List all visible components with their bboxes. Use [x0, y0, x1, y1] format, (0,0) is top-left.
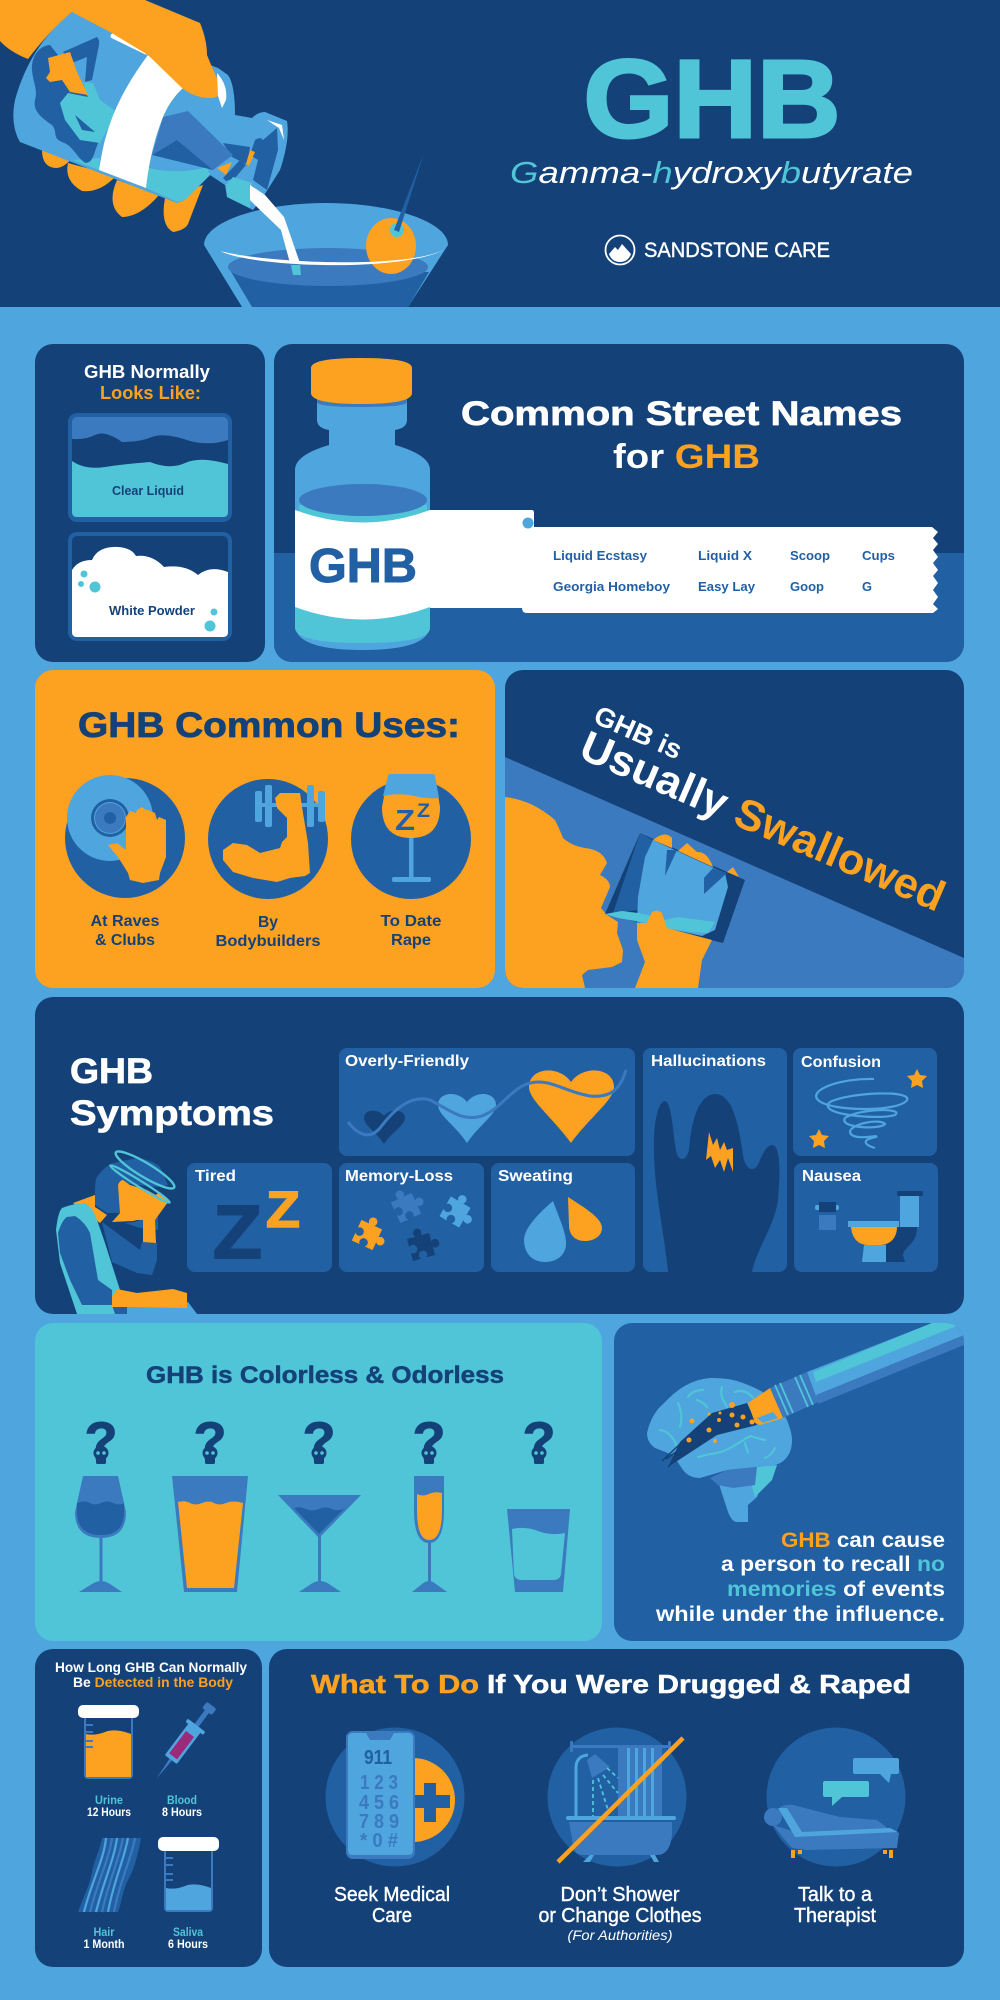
- text: memory: a person to recall no: [721, 1553, 945, 1576]
- label: bodybuilders: Bodybuilders: [216, 933, 321, 950]
- tape with names: Georgia Homeboy: [553, 579, 671, 594]
- tape with names: Liquid X: [698, 548, 752, 563]
- card: sweating: [491, 1163, 635, 1272]
- heading: what to do: If You Were Drugged & Raped: [487, 1669, 911, 1699]
- bottle: GHB: [309, 540, 417, 593]
- icons: question marks with skulls: ?: [84, 1412, 118, 1471]
- panel: street names: [274, 344, 964, 662]
- heading: GHB: GHB: [70, 1052, 153, 1091]
- value: 6 hours: 6 Hours: [168, 1939, 208, 1951]
- icon: phone with medical cross: 7 8 9: [359, 1811, 399, 1833]
- card: memory loss: Memory-Loss: [345, 1168, 453, 1185]
- label: to date: To Date: [380, 913, 442, 930]
- note: for authorities: (For Authorities): [568, 1928, 672, 1943]
- tape with names: Liquid Ecstasy: [553, 548, 648, 563]
- heading: colorless: GHB is Colorless & Odorless: [146, 1362, 504, 1389]
- icon: spiked wine: [351, 774, 471, 899]
- card: confusion: [793, 1048, 937, 1156]
- panel: looks like: [35, 344, 265, 662]
- icon: phone with medical cross: 1 2 3: [360, 1772, 398, 1794]
- glass: flute: [412, 1476, 447, 1592]
- illustration: paintbrush: [662, 1323, 964, 1467]
- panel: detection times: [35, 1649, 262, 1967]
- icon: crossed out shower: [548, 1728, 686, 1866]
- card: tired: Z: [213, 1190, 262, 1274]
- heading: looks like: Looks Like:: [100, 383, 201, 403]
- icon: raves: [65, 775, 185, 898]
- heading: usually swallowed: Usually Swallowed: [573, 722, 952, 921]
- card: nausea: Nausea: [802, 1168, 861, 1185]
- tape with names: [425, 510, 938, 613]
- icon: phone with medical cross: 911: [364, 1747, 392, 1769]
- label: rape: Rape: [391, 932, 431, 949]
- text: memory: GHB can cause: [781, 1529, 945, 1552]
- icon: therapy couch and speech bubbles: [764, 1728, 906, 1866]
- card: overly friendly: Overly-Friendly: [345, 1053, 469, 1070]
- card: white powder: White Powder: [109, 604, 195, 618]
- heading: GHB is: GHB is: [590, 700, 687, 765]
- heading: street names: Common Street Names: [461, 395, 902, 433]
- illustration: head drinking: [505, 797, 745, 988]
- heading: what to do: [311, 1669, 911, 1699]
- tape with names: Cups: [862, 548, 895, 563]
- label: talk to a: Talk to a: [798, 1884, 873, 1906]
- card: tired: Z: [266, 1181, 300, 1238]
- label: raves: At Raves: [90, 913, 160, 930]
- illustration: fingers behind bottle: [42, 150, 203, 232]
- heading: detected in body: Be Detected in the Body: [73, 1675, 233, 1690]
- glass: wine: [75, 1476, 126, 1592]
- label: saliva: Saliva: [173, 1927, 204, 1939]
- heading: detection: How Long GHB Can Normally: [55, 1660, 247, 1675]
- label: blood: Blood: [167, 1795, 197, 1807]
- tape with names: Goop: [790, 579, 824, 594]
- icon: saliva jar: [158, 1837, 219, 1912]
- panel: common uses: [35, 670, 495, 988]
- label: dont shower: Don’t Shower: [560, 1884, 680, 1906]
- card: memory loss: [339, 1163, 484, 1272]
- icons: question marks with skulls: ?: [194, 1412, 226, 1471]
- panel: memory: [614, 1323, 964, 1641]
- icon: phone with medical cross: * 0 #: [360, 1830, 398, 1852]
- icons: question marks with skulls: ?: [522, 1412, 556, 1471]
- label: care: Care: [372, 1905, 412, 1927]
- heading: Symptoms: Symptoms: [70, 1094, 274, 1133]
- icon: phone with medical cross: [326, 1728, 464, 1866]
- tape with names: Scoop: [790, 548, 830, 563]
- illustration: hand holding bottle: [0, 0, 226, 108]
- panel: colorless and odorless: [35, 1323, 602, 1641]
- illustration: tilted bottle: [13, 12, 288, 210]
- tape with names: G: [862, 579, 872, 594]
- subtitle: Gamma- hydroxy butyrate: [510, 155, 913, 190]
- value: 1 month: 1 Month: [84, 1939, 124, 1951]
- label: urine: Urine: [95, 1795, 123, 1807]
- heading: what to do: What To Do: [311, 1669, 479, 1699]
- logo: Sandstone Care: SANDSTONE CARE: [644, 239, 830, 262]
- label: by: By: [258, 914, 278, 931]
- glass: pint: [172, 1476, 248, 1592]
- title: GHB: [584, 38, 840, 161]
- card: sweating: Sweating: [498, 1168, 573, 1185]
- illustration: tired person: [56, 1146, 197, 1314]
- bottle: [295, 358, 430, 650]
- text: memory: memories of events: [727, 1578, 945, 1601]
- icons: question marks with skulls: [84, 1412, 556, 1471]
- tape with names: Easy Lay: [698, 579, 756, 594]
- value: 12 hours: 12 Hours: [87, 1807, 131, 1819]
- value: 8 hours: 8 Hours: [162, 1807, 202, 1819]
- panel: what to do: [269, 1649, 964, 1967]
- icon: hair: [78, 1838, 141, 1912]
- logo: Sandstone Care: [606, 236, 830, 264]
- card: confusion: Confusion: [801, 1054, 881, 1071]
- icons: question marks with skulls: ?: [412, 1412, 446, 1471]
- heading: for GHB: for GHB: [613, 438, 760, 476]
- icon: spiked wine: Z: [417, 801, 430, 822]
- label: change clothes: or Change Clothes: [538, 1905, 702, 1927]
- label: clubs: & Clubs: [95, 932, 155, 949]
- card: tired: [187, 1163, 332, 1274]
- icon: bodybuilders: [208, 779, 328, 899]
- card: clear liquid: Clear Liquid: [112, 484, 184, 498]
- illustration: cocktail glass: [204, 153, 448, 307]
- text: memory: [655, 1529, 945, 1626]
- heading: common uses: GHB Common Uses:: [78, 706, 460, 745]
- header band: [0, 0, 1000, 307]
- card: nausea: [794, 1163, 938, 1272]
- icon: syringe: [148, 1699, 220, 1785]
- label: hair: Hair: [94, 1927, 115, 1939]
- card: tired: Tired: [195, 1168, 236, 1185]
- card: white powder: [68, 532, 232, 641]
- label: seek medical: Seek Medical: [334, 1884, 450, 1906]
- panel: usually swallowed: [505, 670, 964, 988]
- panel: symptoms: [35, 997, 964, 1314]
- label: therapist: Therapist: [794, 1905, 876, 1927]
- icon: phone with medical cross: 4 5 6: [359, 1792, 399, 1814]
- illustration: brain: [647, 1378, 792, 1522]
- heading: GHB normally: GHB Normally: [84, 362, 210, 382]
- card: hallucinations: [643, 1048, 787, 1272]
- icon: spiked wine: Z: [395, 805, 415, 837]
- text: memory: while under the influence.: [655, 1603, 945, 1626]
- glass: water: [507, 1509, 570, 1592]
- icons: question marks with skulls: ?: [302, 1412, 336, 1471]
- icon: urine jar: [78, 1705, 139, 1779]
- glass: martini: [278, 1495, 361, 1592]
- card: overly friendly: [339, 1048, 635, 1156]
- card: clear liquid: [68, 413, 232, 522]
- card: hallucinations: Hallucinations: [651, 1053, 766, 1070]
